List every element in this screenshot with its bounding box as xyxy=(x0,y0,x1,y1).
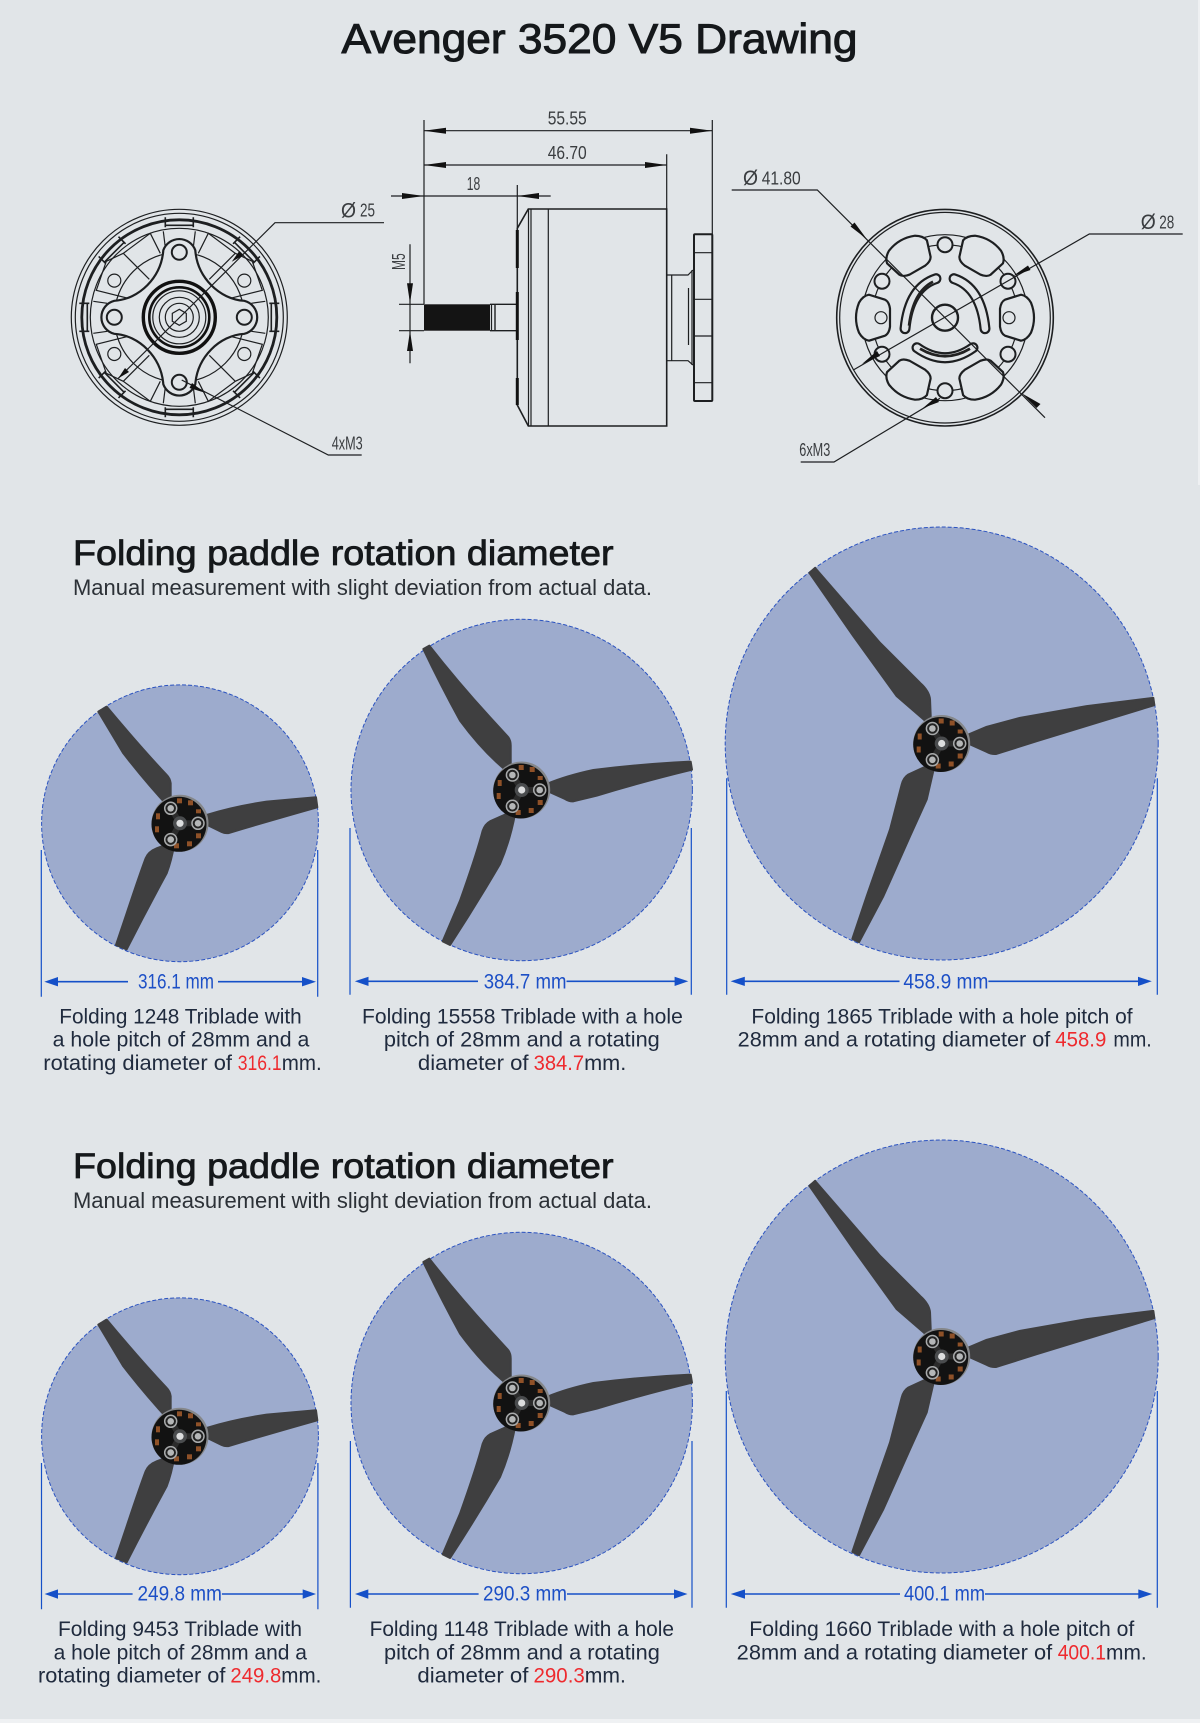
caption: mm. xyxy=(1113,1028,1152,1052)
caption: pitch of 28mm and a rotating xyxy=(384,1028,660,1052)
caption: rotating diameter of xyxy=(38,1665,226,1688)
motor body xyxy=(517,209,667,426)
dimension: 290.3 mm: 290.3 mm xyxy=(483,1583,567,1606)
caption: 249.8 xyxy=(230,1665,281,1688)
leader: diameter 25: 25 xyxy=(360,201,375,221)
caption xyxy=(38,1618,321,1688)
rear mount xyxy=(667,234,712,401)
dimension 46.70: 46.70 xyxy=(548,143,587,163)
panel: Folding 1865 xyxy=(725,527,1158,1052)
panel: Folding 1148 xyxy=(350,1232,692,1688)
caption: mm. xyxy=(585,1665,626,1688)
dimension: 384.7 mm: 384.7 mm xyxy=(484,970,566,993)
dimension: 316.1 mm xyxy=(41,850,318,997)
caption: Folding 1660 Triblade with a hole pitch of xyxy=(749,1618,1134,1641)
panel: Folding 15558 xyxy=(350,619,692,1075)
dimension: 316.1 mm: 316.1 mm xyxy=(138,970,214,993)
dimension 55.55 xyxy=(424,108,712,304)
dimension: 458.9 mm: 458.9 mm xyxy=(903,970,988,993)
caption: Folding 15558 Triblade with a hole xyxy=(362,1005,683,1028)
caption: 458.9 xyxy=(1055,1028,1106,1052)
panel: Folding 9453 xyxy=(38,1298,321,1688)
dimension: 400.1 mm: 400.1 mm xyxy=(904,1583,985,1606)
caption: Folding 1148 Triblade with a hole xyxy=(370,1618,674,1641)
threaded shaft xyxy=(424,304,517,331)
section heading 1: Manual measurement with slight deviation from actual data. xyxy=(73,575,652,600)
technical drawing: front view of motor xyxy=(71,200,384,455)
technical drawing: rear view of motor xyxy=(732,167,1183,462)
leader: 4xM3 xyxy=(182,380,363,455)
caption: 290.3 xyxy=(534,1665,585,1688)
dimension 55.55: 55.55 xyxy=(548,108,587,128)
section heading 2: Manual measurement with slight deviation from actual data. xyxy=(73,1188,652,1213)
leader: diameter 25: Ø xyxy=(341,200,356,222)
technical drawing: side view of motor xyxy=(389,108,712,426)
dimension: 249.8 mm xyxy=(42,1463,318,1609)
caption xyxy=(737,1618,1147,1664)
caption xyxy=(43,1005,322,1075)
caption: a hole pitch of 28mm and a xyxy=(53,1028,310,1052)
title: Avenger 3520 V5 Drawing xyxy=(342,15,858,62)
dimension: 458.9 mm xyxy=(727,778,1157,995)
caption: pitch of 28mm and a rotating xyxy=(384,1641,660,1664)
leader: 6xM3: 6xM3 xyxy=(799,440,830,460)
caption xyxy=(362,1005,683,1075)
caption: 400.1 xyxy=(1058,1641,1106,1664)
caption: mm. xyxy=(584,1052,626,1075)
leader: diameter 25 xyxy=(118,200,384,378)
caption xyxy=(738,1005,1152,1052)
dimension 46.70 xyxy=(424,143,667,209)
dimension 18 xyxy=(391,174,551,228)
leader: diameter 41.80: 41.80 xyxy=(762,168,801,188)
leader: diameter 41.80: Ø xyxy=(743,167,758,190)
leader: diameter 41.80 xyxy=(732,167,1045,418)
section heading 2: Folding paddle rotation diameter xyxy=(73,1147,614,1186)
dimension M5 xyxy=(389,244,424,363)
dimension: 290.3 mm xyxy=(350,1441,692,1608)
section heading 1: Folding paddle rotation diameter xyxy=(73,534,614,573)
section heading 2 xyxy=(73,1147,652,1213)
caption: 28mm and a rotating diameter of xyxy=(737,1641,1052,1664)
leader: diameter 28: Ø xyxy=(1141,211,1156,234)
leader: diameter 28 xyxy=(853,211,1183,370)
caption: a hole pitch of 28mm and a xyxy=(54,1641,307,1664)
caption xyxy=(370,1618,674,1688)
dimension: 249.8 mm: 249.8 mm xyxy=(138,1583,222,1606)
caption: mm. xyxy=(1106,1641,1147,1664)
dimension: 384.7 mm xyxy=(350,828,691,995)
caption: rotating diameter of xyxy=(43,1052,232,1075)
caption: 384.7 xyxy=(534,1052,584,1075)
caption: diameter of xyxy=(418,1052,529,1075)
caption: Folding 1865 Triblade with a hole pitch of xyxy=(751,1005,1133,1028)
caption: 28mm and a rotating diameter of xyxy=(738,1028,1050,1052)
panel: Folding 1660 xyxy=(725,1140,1158,1664)
caption: Folding 9453 Triblade with xyxy=(58,1618,302,1641)
leader: 6xM3 xyxy=(799,397,940,462)
caption: Folding 1248 Triblade with xyxy=(59,1005,302,1028)
dimension: 400.1 mm xyxy=(726,1391,1157,1608)
caption: diameter of xyxy=(417,1665,529,1688)
leader: 4xM3: 4xM3 xyxy=(332,433,363,453)
caption: mm. xyxy=(281,1665,321,1688)
dimension M5: M5 xyxy=(389,253,409,270)
dimension 18: 18 xyxy=(467,174,480,194)
section heading 1 xyxy=(73,534,652,600)
leader: diameter 28: 28 xyxy=(1159,212,1174,232)
caption: mm. xyxy=(282,1052,322,1075)
panel: Folding 1248 xyxy=(41,685,322,1075)
caption: 316.1 xyxy=(238,1052,282,1075)
